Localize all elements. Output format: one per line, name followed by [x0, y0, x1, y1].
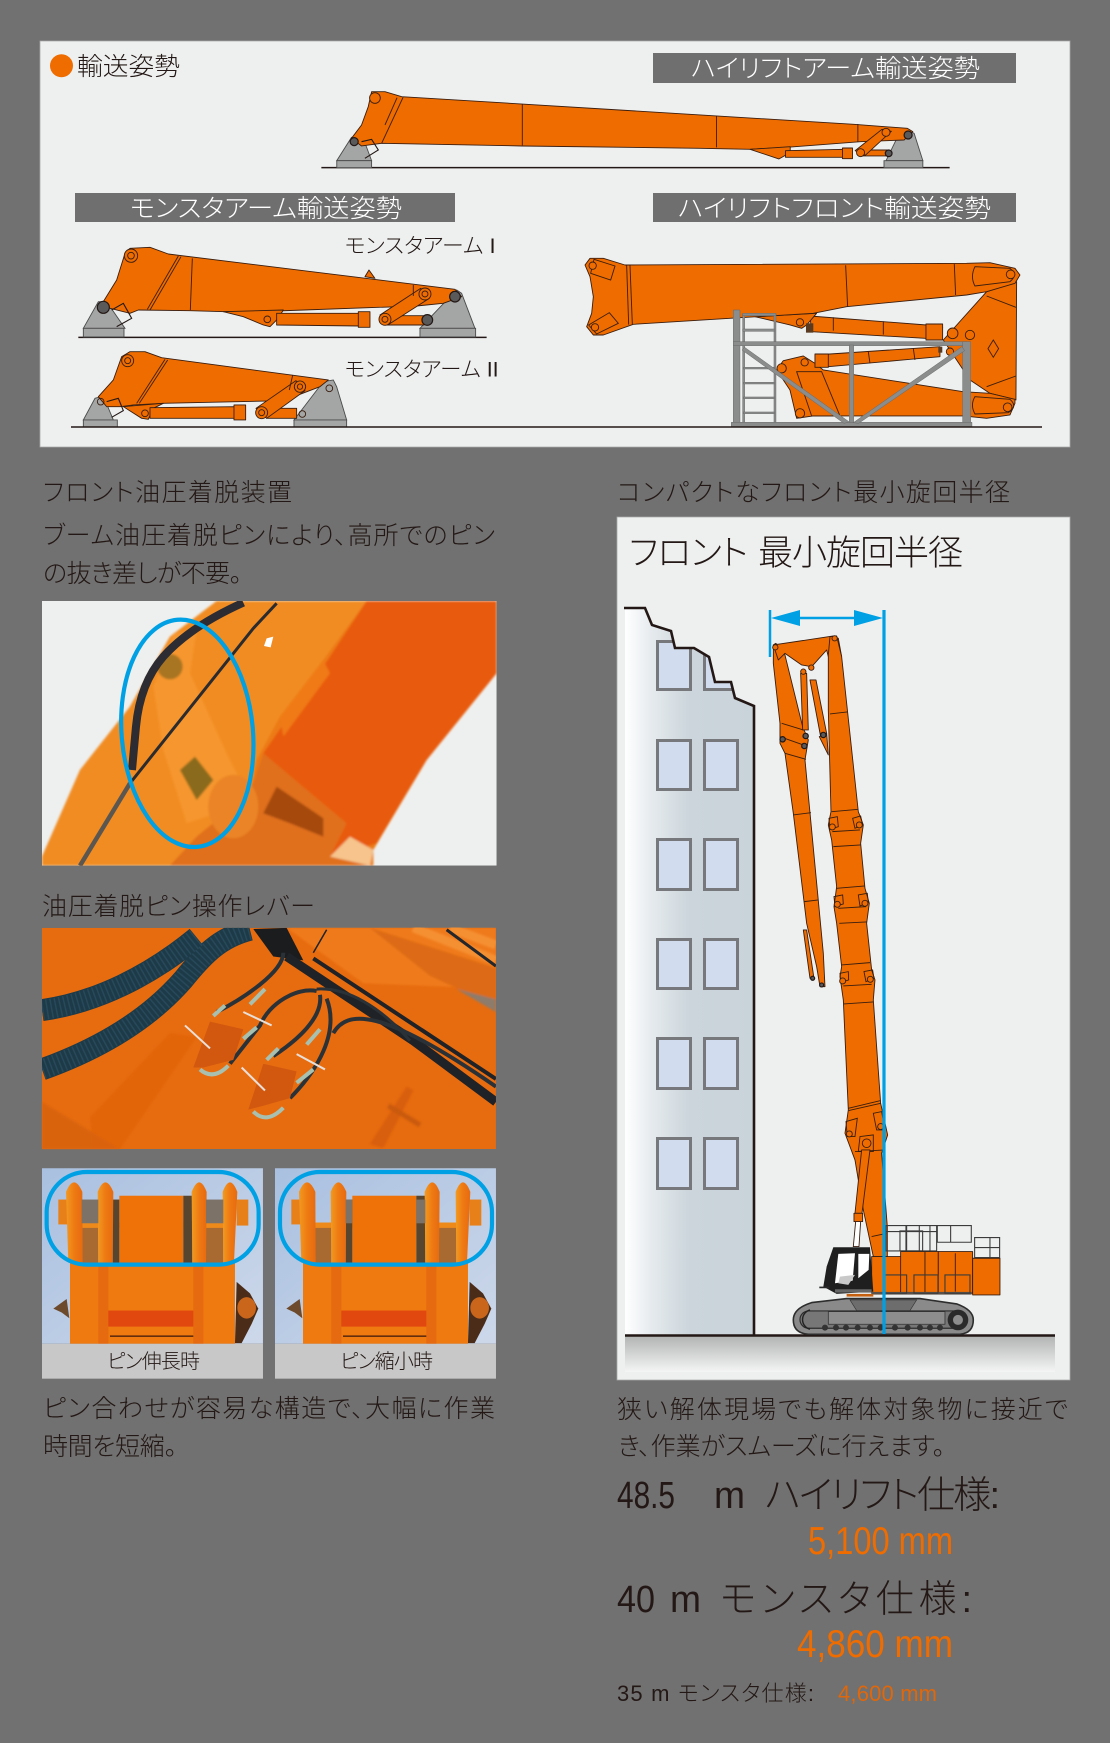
label: monster arm: [75, 193, 455, 223]
label: high lift front: ハイリフトフロント輸送姿勢: [678, 195, 991, 223]
text: pin alignment description: 時間を短縮。: [43, 1433, 177, 1461]
text: pin extended caption: ピン伸長時: [107, 1350, 200, 1373]
ground line: [71, 426, 1042, 428]
upper structure: [872, 1252, 1000, 1295]
text: front hydraulic detachment heading: フロント油圧着脱装置: [43, 479, 292, 507]
cab: [819, 1247, 873, 1297]
sky above broken roofline: [625, 592, 760, 706]
arrow: swing radius dimension: [770, 610, 884, 1334]
boom cylinder: [853, 1139, 871, 1247]
value: 4,600 mm: 4,600 mm: [838, 1681, 937, 1706]
monster arm II: [83, 352, 499, 427]
spec: 35 m monster: 35 m モンスタ仕様:: [617, 1681, 814, 1706]
text: pin retracted caption: ピン縮小時: [340, 1350, 433, 1373]
text: hydraulic pin description: の抜き差しが不要。: [43, 560, 242, 588]
spec: 40 m monster: モンスタ仕様:: [720, 1579, 972, 1621]
pins and joints: [773, 636, 884, 1137]
text: hydraulic pin description: [43, 522, 495, 588]
stand frame and ladder: [731, 310, 972, 427]
photo: boom joint with hydraulic pin: [42, 601, 497, 866]
label: monster arm I: モンスタアーム I: [345, 235, 496, 258]
panel: transport posture: [40, 41, 1070, 447]
text: swing radius description: 狭い解体現場でも解体対象物に接近で: [617, 1396, 1068, 1424]
text: hydraulic pin description: ブーム油圧着脱ピンにより、高所でのピン: [43, 522, 495, 550]
diagram: high lift front on stand: [585, 258, 1020, 427]
callout: blue rounded frame left: [47, 1172, 259, 1265]
spec: 48.5 m high lift: 48.5: [617, 1475, 675, 1517]
spec: 40 m monster: 40: [617, 1579, 655, 1621]
text: swing radius description: き、作業がスムーズに行えます。: [618, 1433, 945, 1461]
spec: 48.5 m high lift: m: [714, 1475, 745, 1517]
building: [624, 592, 760, 1335]
title: minimum swing radius: 最小旋回半径: [758, 534, 963, 573]
windows: [658, 642, 738, 1188]
long arm: [773, 636, 842, 987]
callout: blue ellipse: [119, 618, 256, 850]
main boom: [828, 636, 888, 1257]
photo: pin extended: [42, 1168, 263, 1379]
text: swing radius description: [617, 1396, 1068, 1461]
title: minimum swing radius: フロント: [629, 534, 748, 573]
monster arm I: [78, 235, 496, 337]
diagram: high reach machine: [773, 636, 1000, 1334]
label: monster arm II: モンスタアーム II: [345, 358, 499, 381]
heading: transport posture: 輸送姿勢: [77, 53, 180, 81]
caption: pin retracted: [275, 1344, 496, 1379]
photo: hydraulic pin lever: [42, 928, 496, 1149]
spec: 48.5 m high lift: ハイリフト仕様:: [765, 1475, 1000, 1517]
caption: pin extended: [42, 1344, 263, 1379]
photo: pin retracted: [275, 1168, 496, 1379]
spec: 48.5 m high lift: [617, 1475, 1000, 1517]
broken roofline and wall: [624, 608, 754, 1335]
value: 4,860 mm: 4,860 mm: [797, 1623, 953, 1666]
label: high lift arm: ハイリフトアーム輸送姿勢: [691, 55, 980, 83]
title: minimum swing radius: [629, 534, 963, 573]
text: lever heading: 油圧着脱ピン操作レバー: [42, 893, 315, 921]
ground: [625, 1336, 1055, 1372]
callout: blue rounded frame right: [280, 1172, 492, 1265]
text: pin alignment description: ピン合わせが容易な構造で、大幅に作業: [43, 1395, 495, 1423]
handrails: [885, 1226, 1000, 1293]
value: 5,100 mm: 5,100 mm: [808, 1520, 953, 1563]
text: pin alignment description: [43, 1395, 495, 1461]
label: monster arm: モンスタアーム輸送姿勢: [130, 195, 402, 223]
diagram: high lift arm on supports: [321, 92, 950, 168]
text: compact front heading: コンパクトなフロント最小旋回半径: [617, 479, 1010, 507]
crawler: [793, 1299, 973, 1334]
panel: minimum swing radius: [617, 517, 1070, 1380]
diagram: monster arm I and II: [78, 235, 499, 427]
spec: 40 m monster: m: [670, 1579, 701, 1621]
